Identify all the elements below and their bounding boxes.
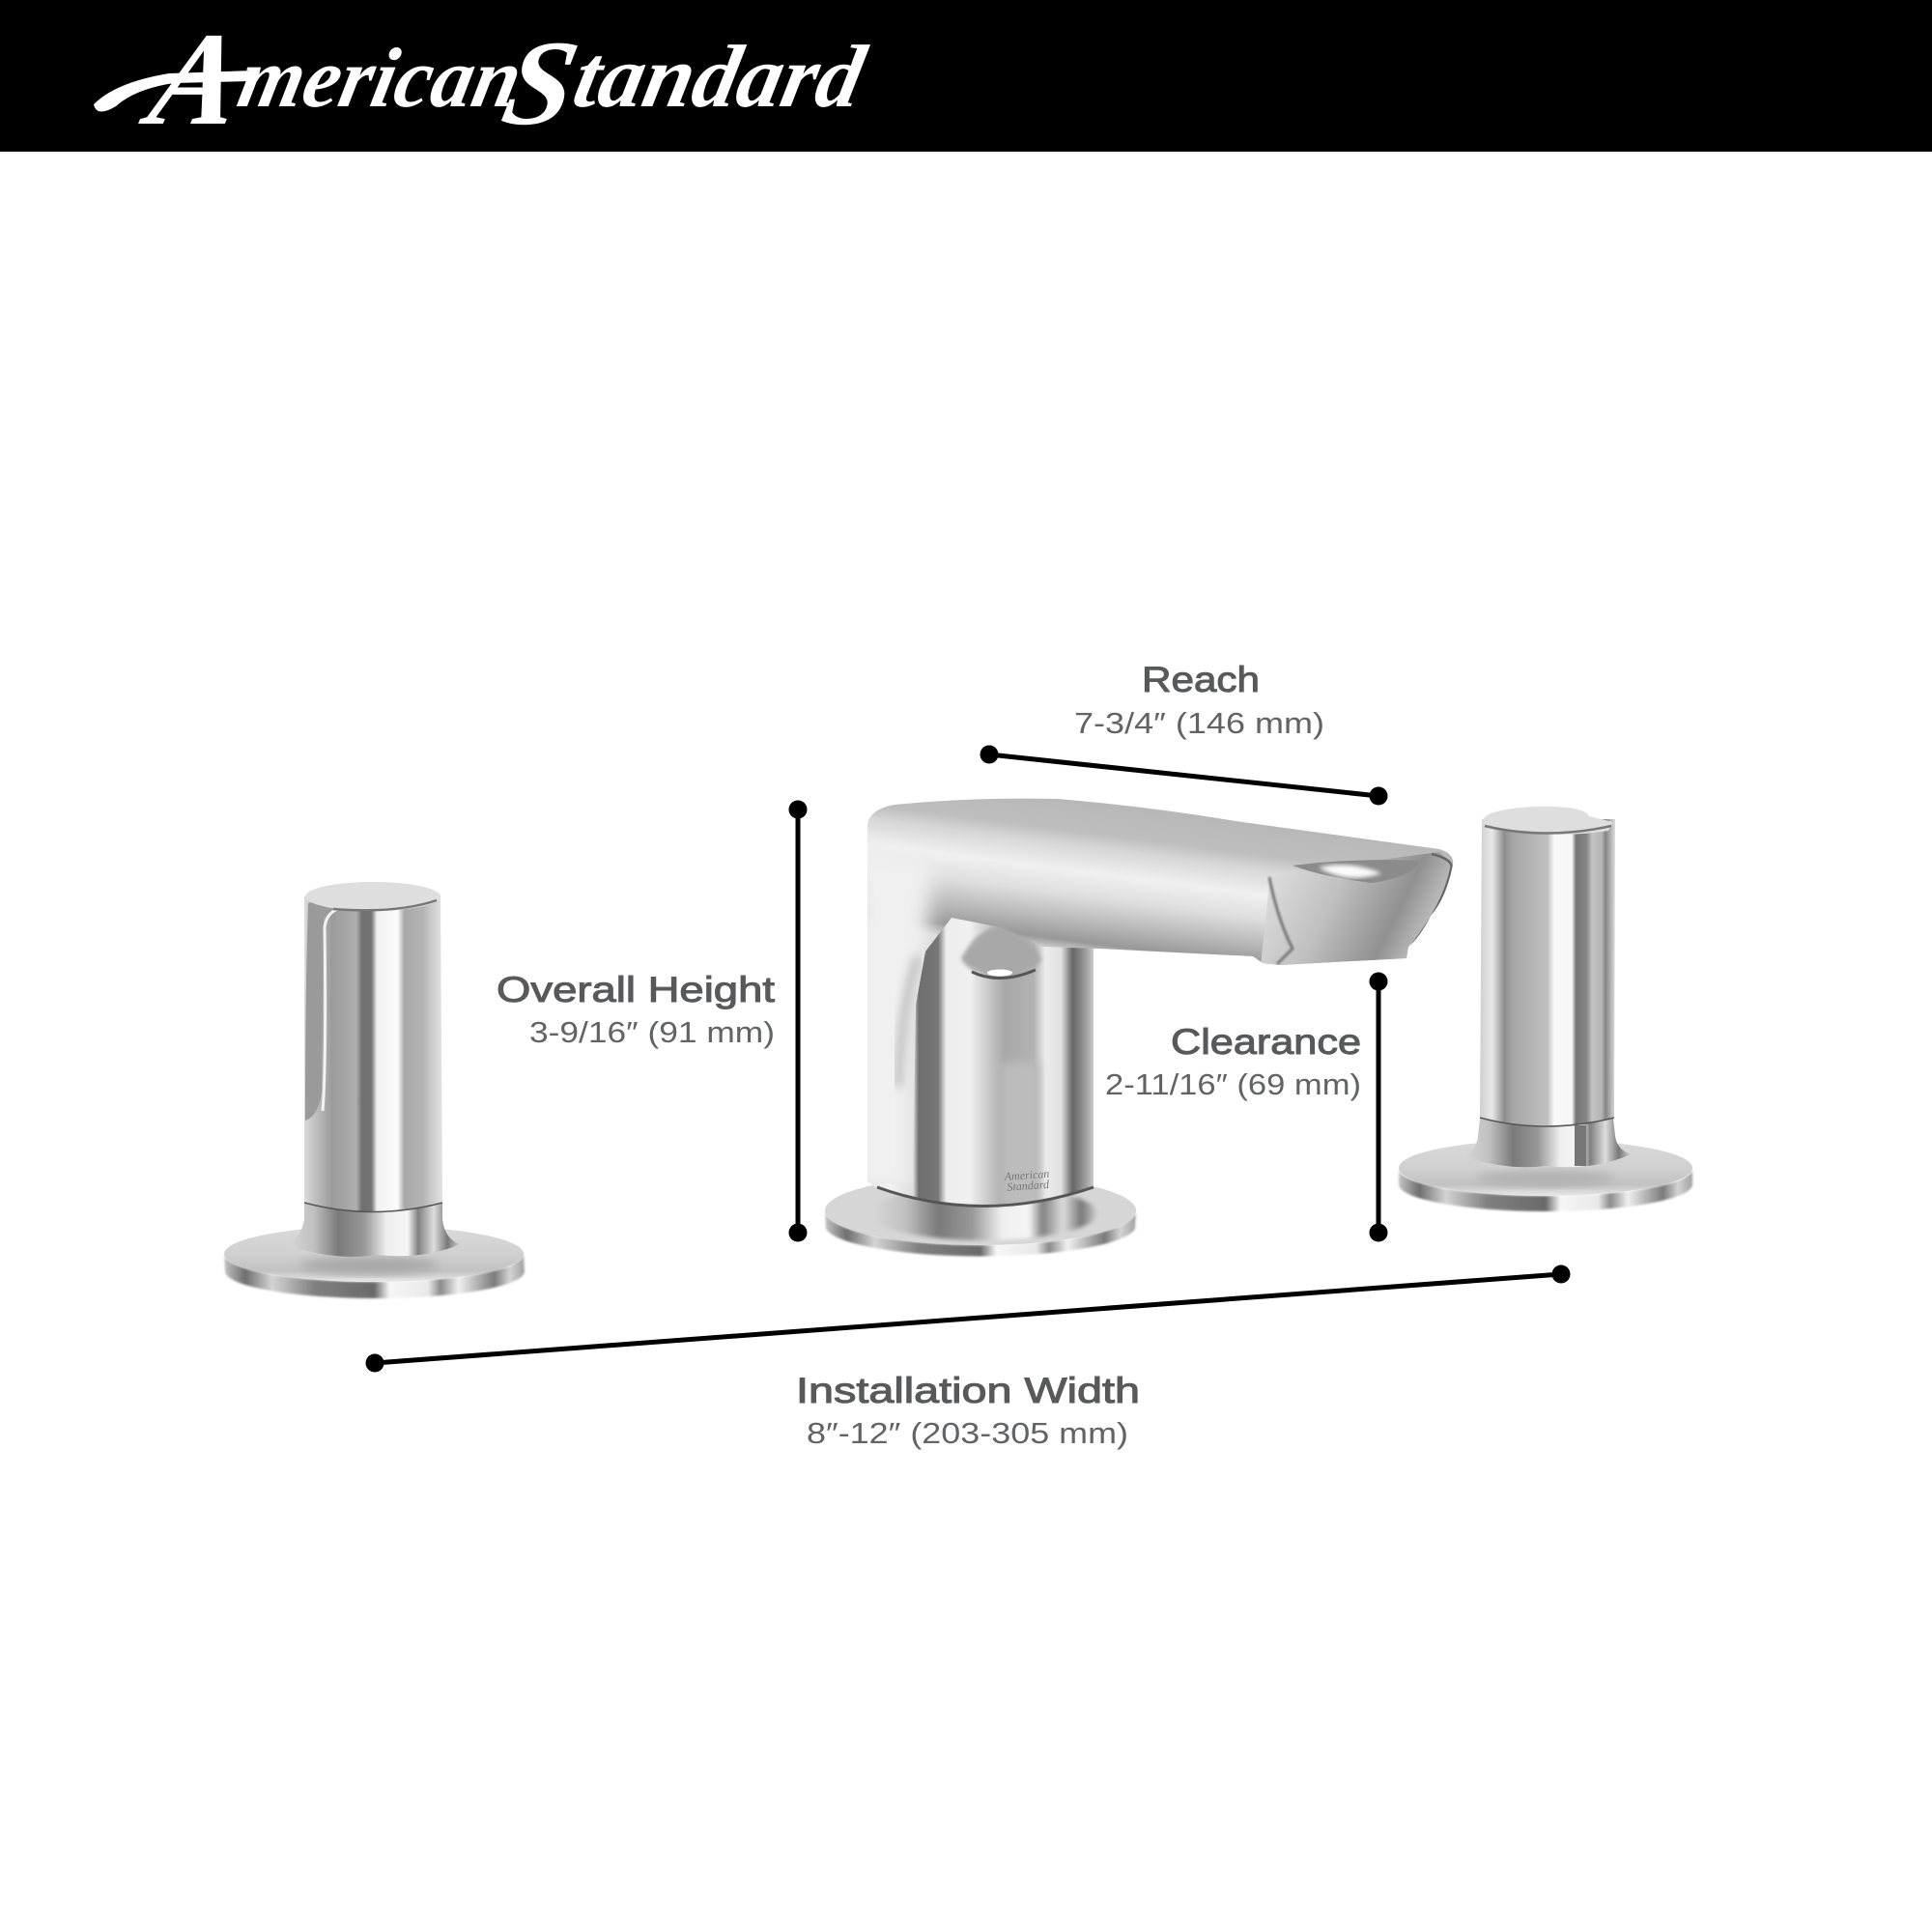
- spout flange: [825, 1176, 1136, 1256]
- logo: American Standard: tandard: [565, 28, 874, 127]
- right handle: [1399, 807, 1692, 1211]
- label: clearance: [1105, 1022, 1361, 1101]
- label: reach: Reach: [1142, 660, 1260, 699]
- label: reach: [1074, 660, 1324, 740]
- column logo: Standard: [1007, 1178, 1050, 1194]
- label: reach: 7-3/4″ (146 mm): [1074, 706, 1324, 740]
- column base collar: [869, 1186, 1097, 1240]
- dimension: clearance line: [1370, 972, 1387, 1242]
- centre spout: [825, 792, 1459, 1256]
- label: overall height: 3-9/16″ (91 mm): [529, 1015, 775, 1049]
- label: installation width: Installation Width: [796, 1371, 1140, 1410]
- left handle: [224, 882, 525, 1298]
- left handle collar: [286, 1201, 460, 1257]
- left handle cylinder: [304, 896, 442, 1211]
- right handle collar: [1463, 1118, 1631, 1167]
- column base ring: [877, 1187, 1094, 1206]
- logo: American Standard: S: [493, 14, 589, 151]
- spout under-joint: [961, 927, 1041, 979]
- spout body: [855, 792, 1459, 1193]
- right handle ring line: [1480, 1118, 1614, 1126]
- right handle cap edge: [1485, 826, 1611, 833]
- right handle cylinder: [1480, 819, 1615, 1126]
- label: clearance: 2-11/16″ (69 mm): [1105, 1067, 1361, 1101]
- label: overall height: Overall Height: [497, 970, 776, 1009]
- column logo: American: [1004, 1167, 1050, 1183]
- label: installation width: 8″-12″ (203-305 mm): [807, 1416, 1128, 1450]
- logo: American Standard: merican: [231, 31, 530, 125]
- left handle base plate: [224, 1226, 525, 1298]
- dimension: overall height line: [788, 800, 808, 1242]
- logo: American Standard: A: [131, 5, 257, 153]
- label: installation width: [796, 1371, 1140, 1450]
- left handle cap edge: [333, 900, 437, 910]
- right handle top cap: [1483, 807, 1613, 835]
- left handle lever slot: [305, 901, 332, 1121]
- label: clearance: Clearance: [1171, 1022, 1361, 1062]
- header band: [0, 0, 1932, 152]
- dimension: installation width line: [365, 1265, 1571, 1372]
- spout column: [869, 918, 1094, 1205]
- right handle dark stripe: [1575, 1125, 1586, 1166]
- logo: American Standard: [94, 5, 877, 153]
- label: overall height: [497, 970, 776, 1049]
- dimension: reach line: [980, 746, 1387, 806]
- left handle slot edge: [323, 909, 338, 1111]
- right handle base plate: [1399, 1140, 1692, 1211]
- left handle ring line: [304, 1203, 442, 1211]
- left handle top cap: [305, 882, 440, 911]
